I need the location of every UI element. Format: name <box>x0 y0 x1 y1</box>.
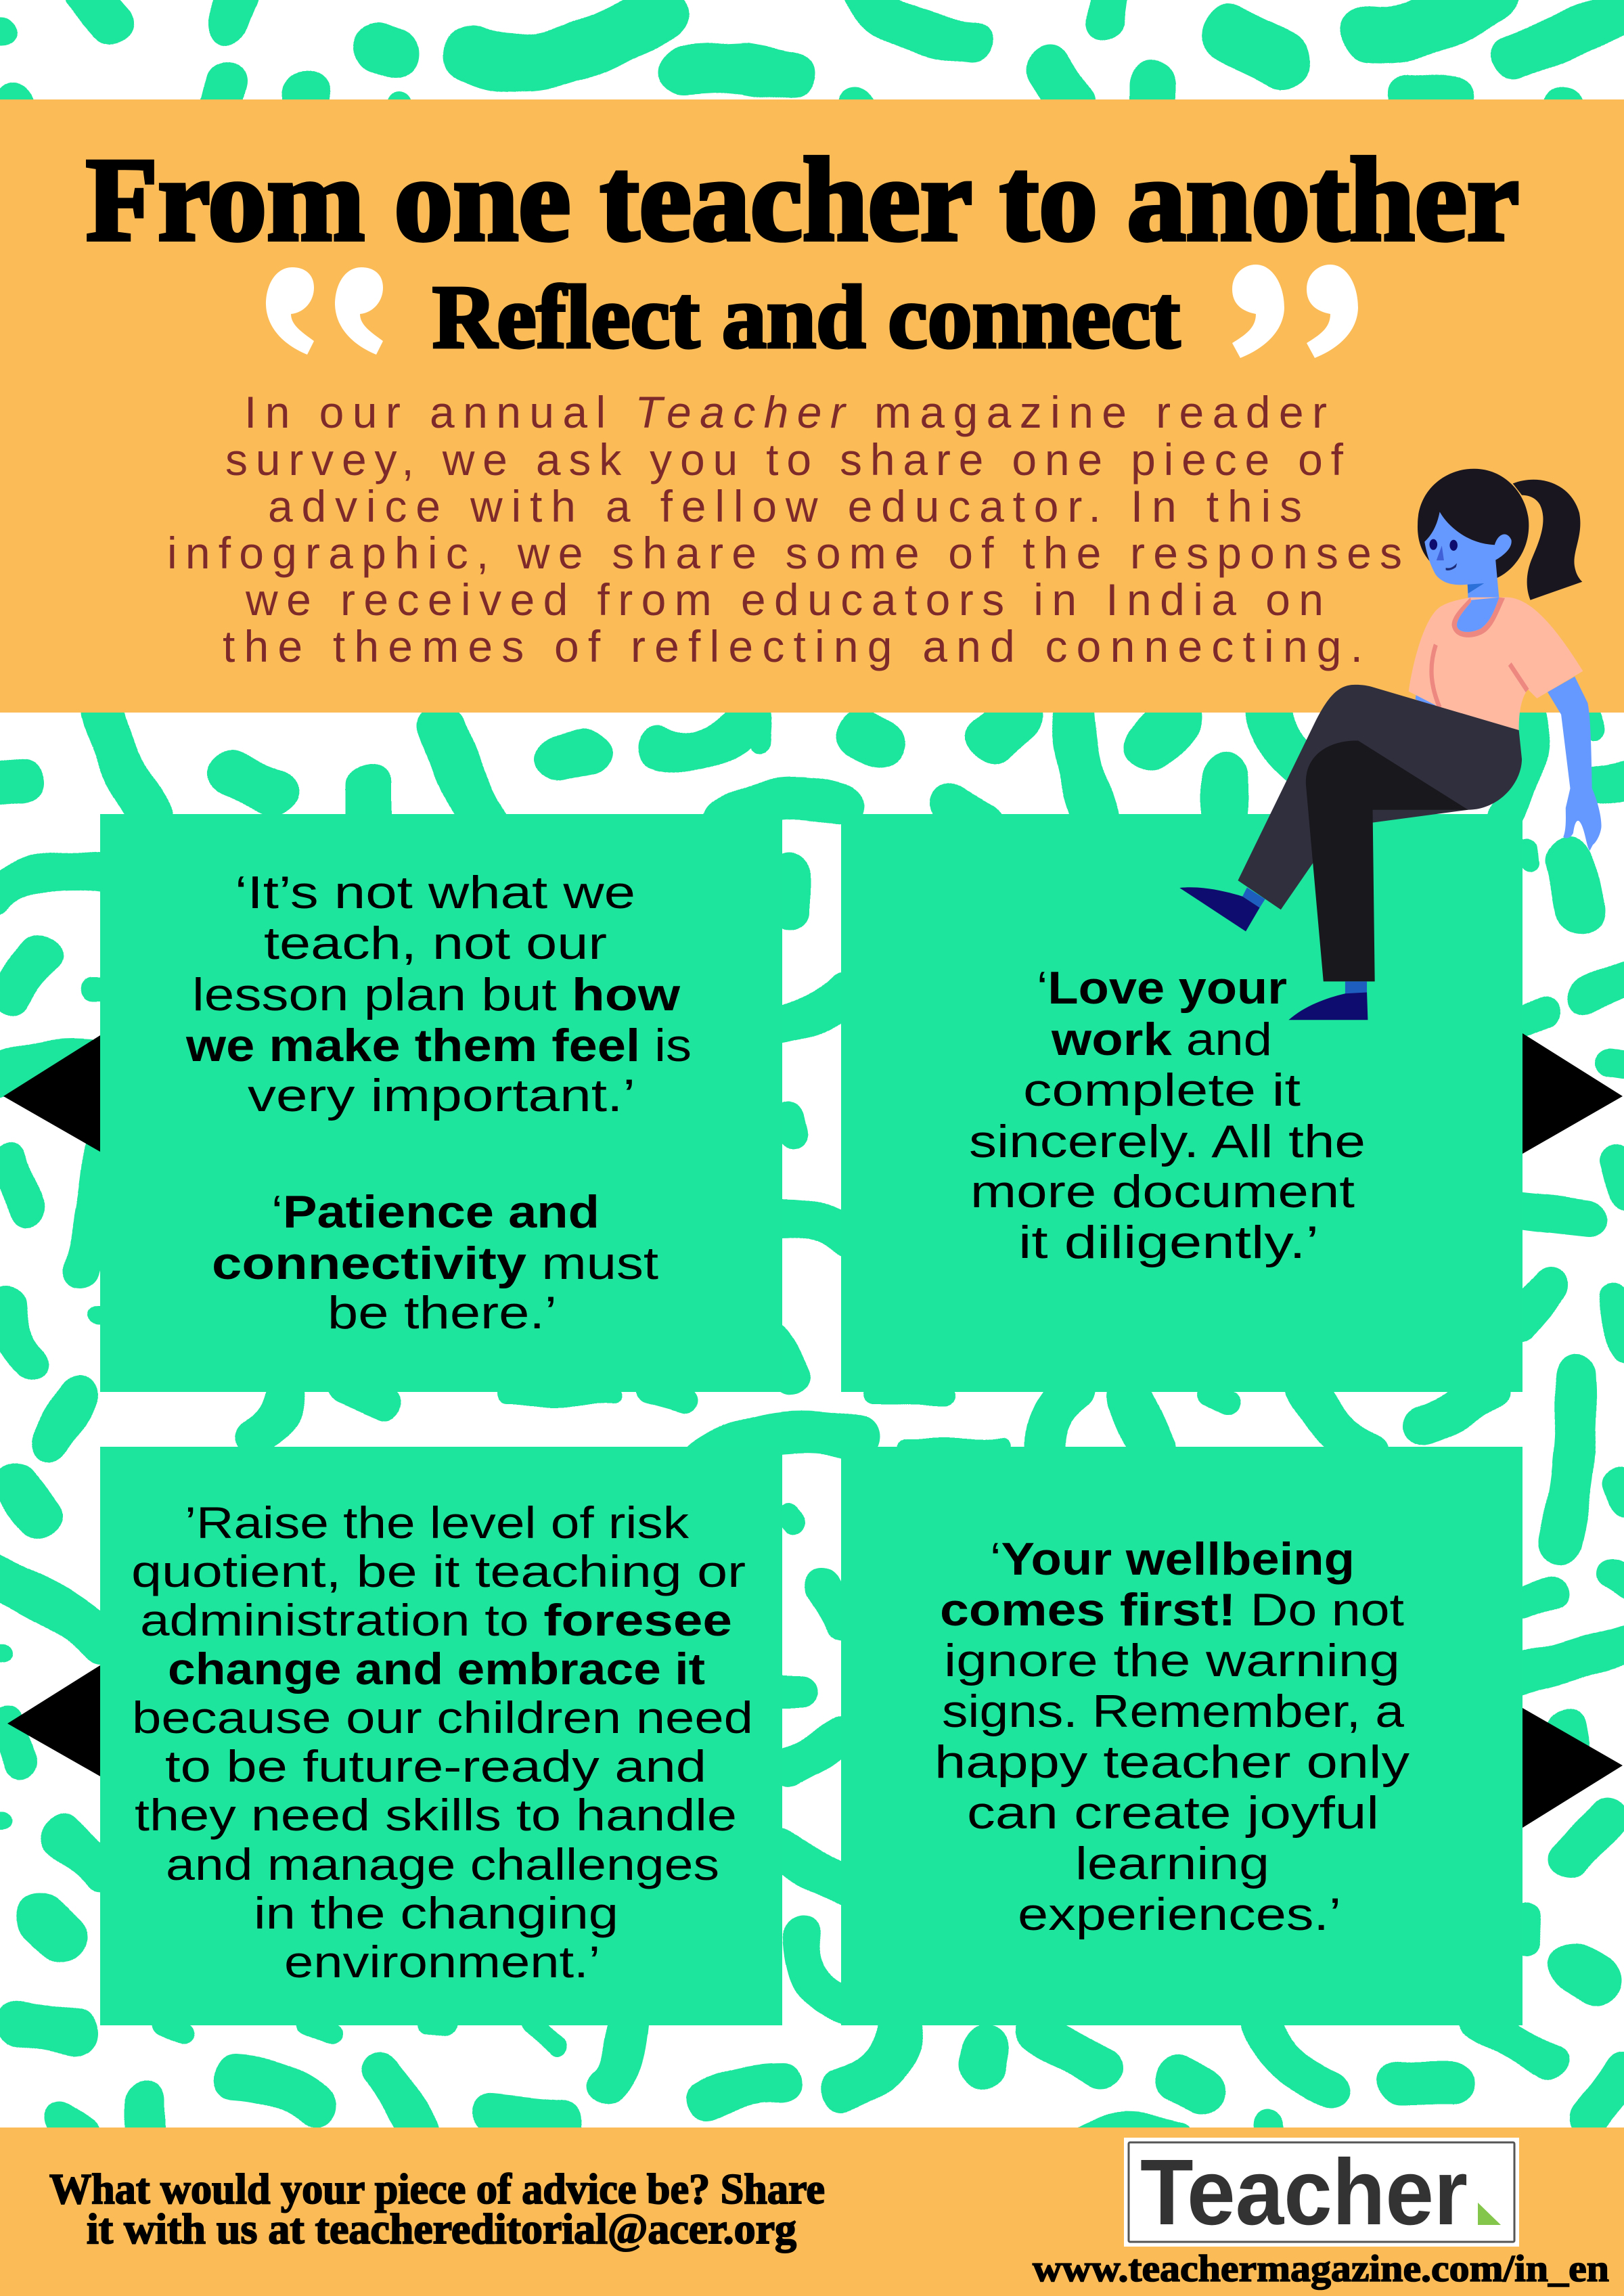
footer call to action: What would your piece of advice be? Share <box>49 2165 825 2213</box>
intro text block: survey, we ask you to share one piece of <box>225 434 1344 485</box>
quote text: how we make them feel: connectivity must <box>212 1238 658 1289</box>
footer call to action <box>49 2165 825 2253</box>
quote text: love your work: it diligently.’ <box>1018 1217 1319 1268</box>
panel: quote bottom right <box>841 1447 1522 2025</box>
quote text: foresee change and embrace it: ’Raise the level of risk <box>185 1498 690 1548</box>
quote text: your wellbeing comes first: can create joyful <box>967 1787 1379 1839</box>
quote text: foresee change and embrace it: and manage challenges <box>166 1839 719 1889</box>
header banner <box>0 99 1624 713</box>
quote text: how we make them feel: very important.’ <box>248 1070 635 1121</box>
panel: quote top left <box>100 814 782 1392</box>
quote text: how we make them feel <box>185 867 692 1338</box>
quote text: how we make them feel: we make them feel is <box>185 1020 692 1071</box>
quote text: love your work: complete it <box>1023 1064 1301 1116</box>
quote text: your wellbeing comes first: ignore the warning <box>944 1635 1400 1686</box>
panel: quote top right <box>841 814 1522 1392</box>
panel: quote bottom left <box>100 1447 782 2025</box>
intro text block: we received from educators in India on <box>245 575 1324 625</box>
quote text: how we make them feel: ‘It’s not what we <box>235 867 635 918</box>
quote text: your wellbeing comes first: signs. Remember, a <box>942 1686 1404 1737</box>
icon: opening quotation marks <box>266 267 383 355</box>
illustration: seated teacher <box>1179 469 1602 1020</box>
footer call to action: it with us at teachereditorial@acer.org <box>87 2205 796 2253</box>
quote text: foresee change and embrace it: administration to foresee <box>140 1595 732 1645</box>
quote text: your wellbeing comes first <box>934 1533 1409 1940</box>
quote text: love your work: sincerely. All the <box>969 1116 1366 1167</box>
quote text: how we make them feel: lesson plan but how <box>192 969 681 1020</box>
quote text: your wellbeing comes first: learning <box>1075 1838 1269 1889</box>
quote text: your wellbeing comes first: happy teacher only <box>934 1736 1409 1788</box>
quote text: foresee change and embrace it: they need skills to handle <box>135 1790 737 1840</box>
quote text: love your work: work and <box>1051 1014 1272 1065</box>
title: From one teacher to another <box>86 134 1519 266</box>
intro text block: the themes of reflecting and connecting. <box>223 621 1363 671</box>
quote text: foresee change and embrace it <box>131 1498 753 1987</box>
quote text: foresee change and embrace it: to be future-ready and <box>165 1741 706 1791</box>
arrow: top right <box>1522 1033 1623 1154</box>
quote text: your wellbeing comes first: comes first! Do not <box>940 1584 1404 1636</box>
arrow: bottom left <box>7 1665 100 1776</box>
intro text block: In our annual Teacher magazine reader <box>244 387 1327 437</box>
quote text: how we make them feel: ‘Patience and <box>271 1186 600 1238</box>
quote text: foresee change and embrace it: in the changing <box>254 1888 618 1938</box>
quote text: foresee change and embrace it: quotient, be it teaching or <box>131 1546 746 1596</box>
website url: www.teachermagazine.com/in_en <box>1033 2248 1609 2290</box>
intro text block <box>167 387 1402 671</box>
subtitle: Reflect and connect <box>432 267 1180 367</box>
footer banner <box>0 2128 1624 2296</box>
quote text: love your work: more document <box>970 1166 1355 1217</box>
arrow: bottom right <box>1522 1708 1623 1828</box>
quote text: love your work: ‘Love your <box>1037 962 1287 1014</box>
intro text block: infographic, we share some of the responses <box>167 528 1402 578</box>
intro text block: advice with a fellow educator. In this <box>268 481 1302 531</box>
quote text: foresee change and embrace it: because our children need <box>132 1692 753 1742</box>
quote text: how we make them feel: teach, not our <box>264 918 607 969</box>
logo: Teacher magazine: Teacher <box>1140 2140 1468 2245</box>
quote text: love your work <box>969 962 1366 1268</box>
arrow: top left <box>3 1035 100 1152</box>
icon: closing quotation marks <box>1232 265 1358 358</box>
quote text: your wellbeing comes first: experiences.’ <box>1018 1889 1341 1940</box>
quote text: how we make them feel: be there.’ <box>328 1287 557 1338</box>
quote text: foresee change and embrace it: change and embrace it <box>168 1644 705 1694</box>
quote text: your wellbeing comes first: ‘Your wellbeing <box>990 1533 1355 1585</box>
quote text: foresee change and embrace it: environment.’ <box>284 1937 600 1987</box>
